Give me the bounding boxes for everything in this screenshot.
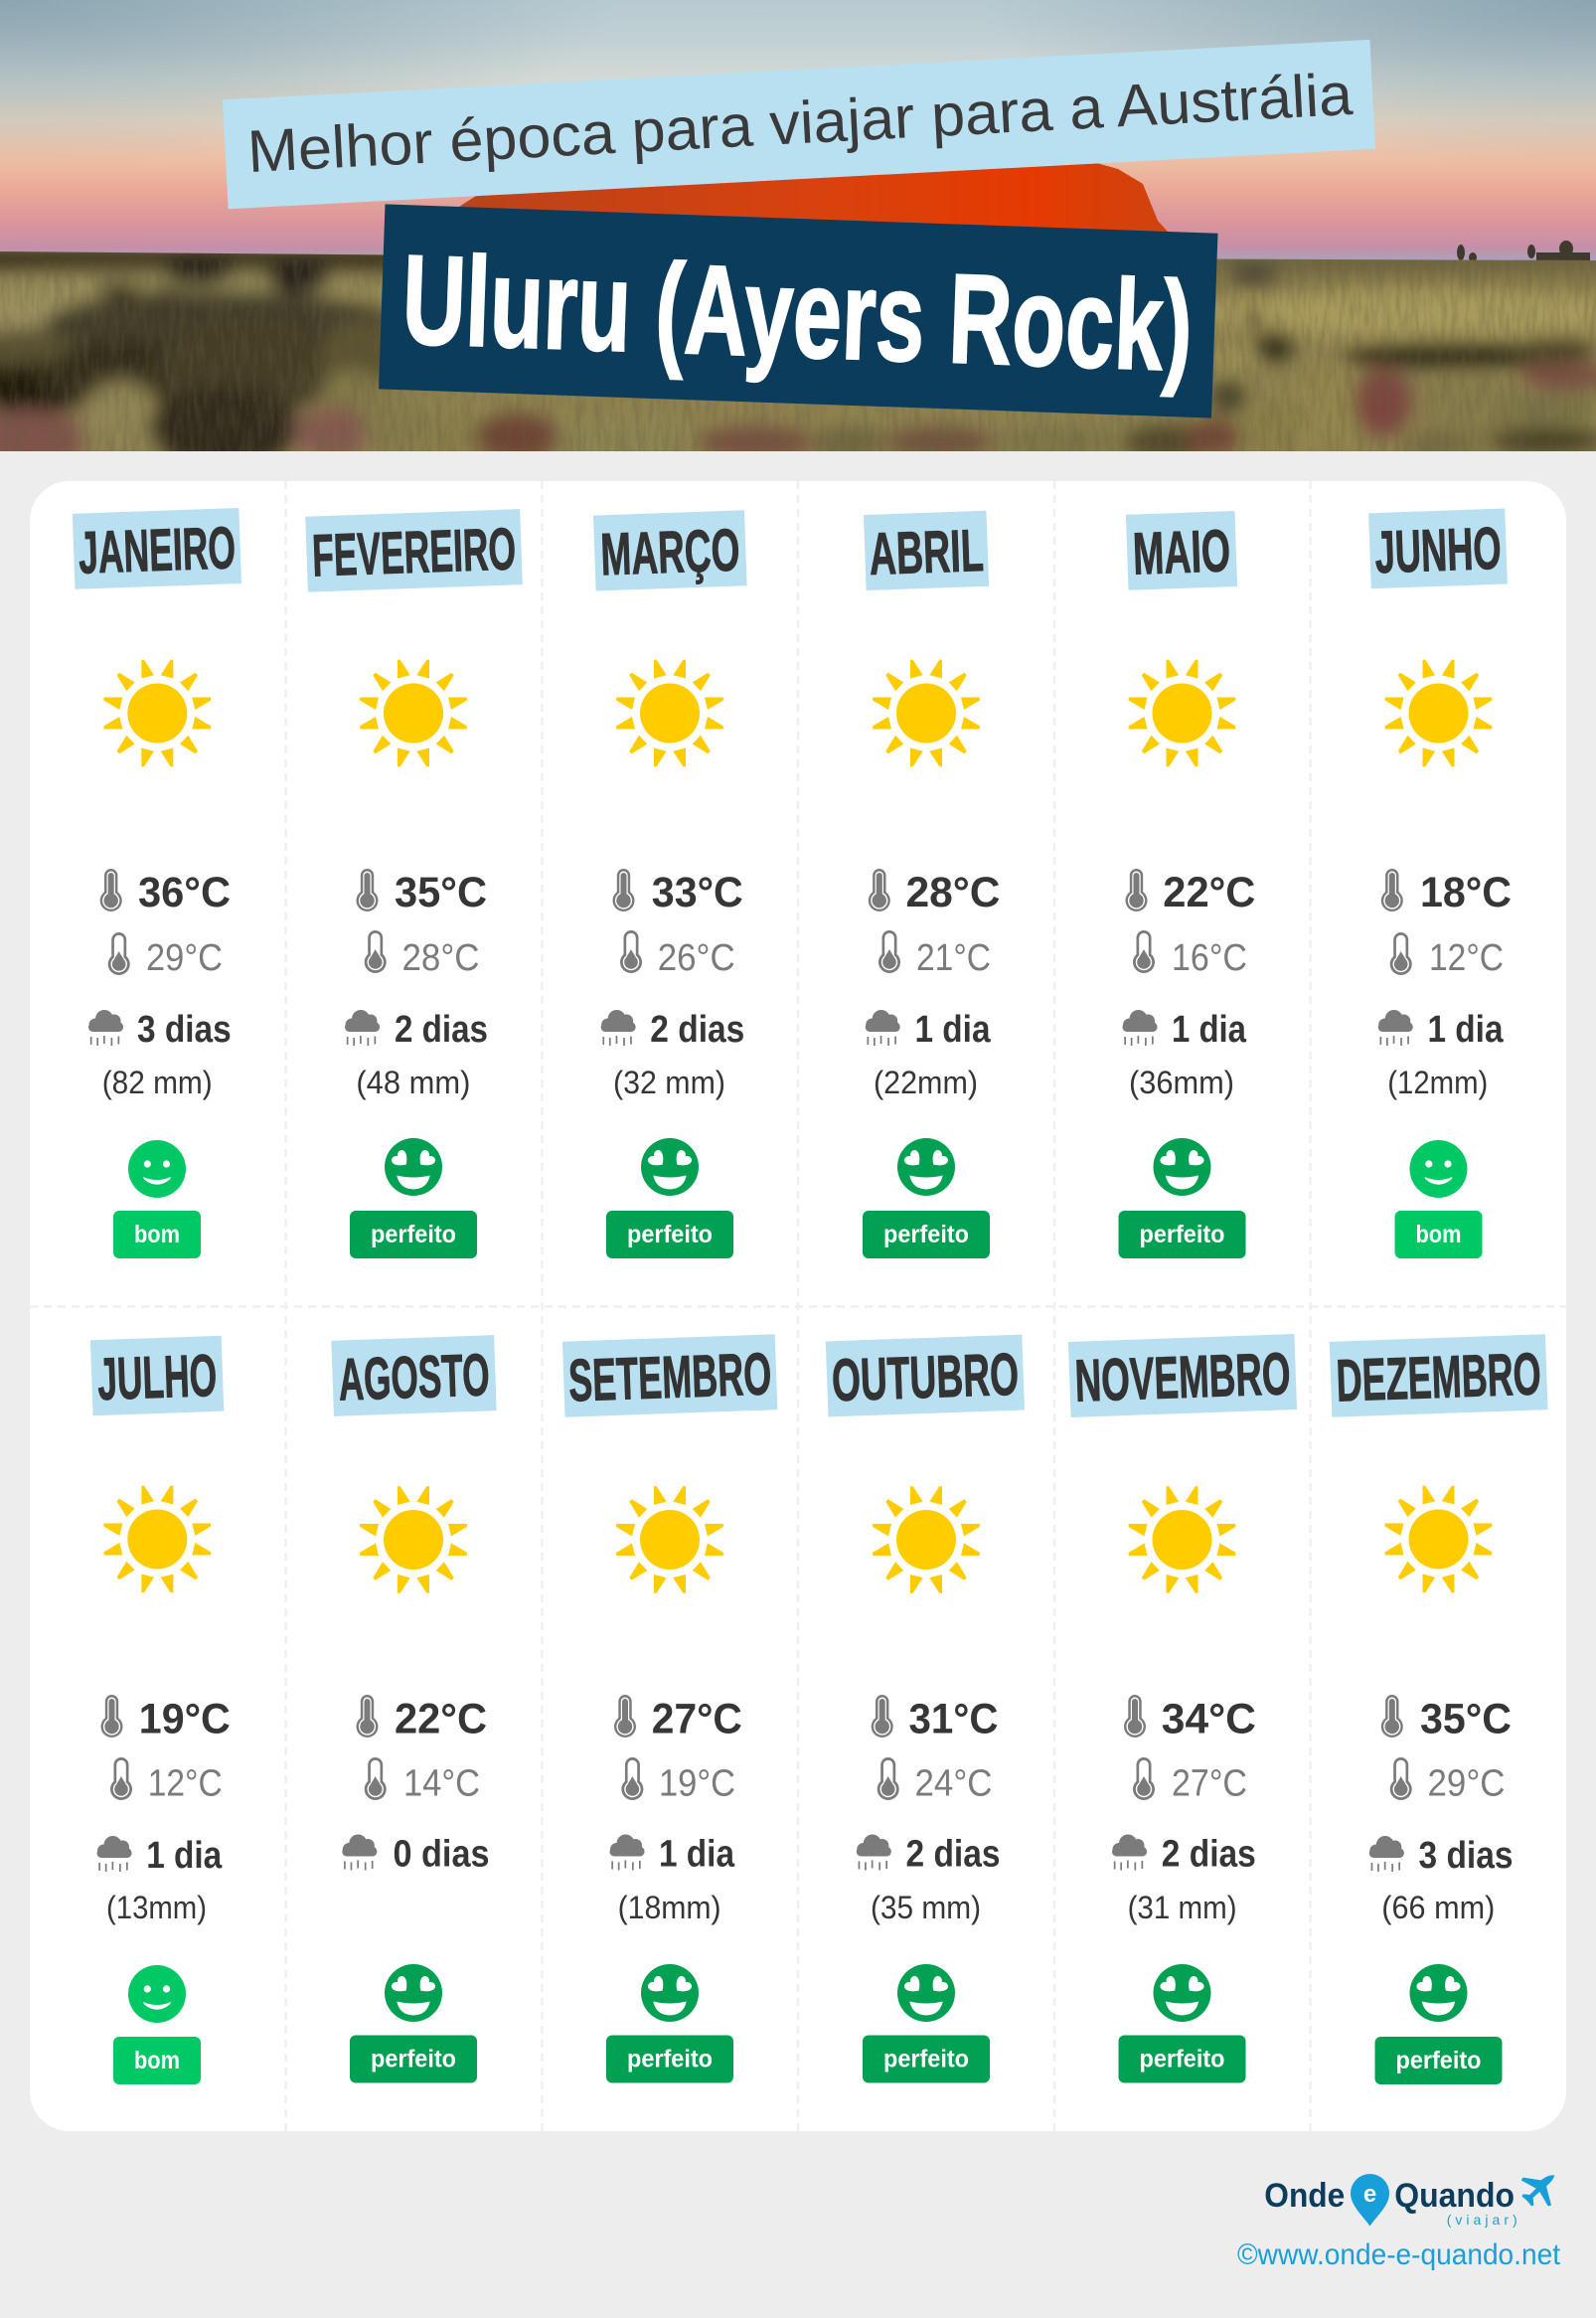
month: Junho — [1368, 509, 1512, 1258]
icon: thermometer low — [878, 930, 900, 973]
panel: months card — [30, 481, 1566, 2131]
icon: rain — [601, 1010, 636, 1046]
rainfall: (13mm) — [106, 1890, 207, 1925]
icon: rain — [97, 1836, 131, 1872]
rating: bom — [113, 2037, 201, 2084]
icon: thermometer high — [614, 1695, 636, 1738]
max temperature: 36°C — [138, 869, 231, 916]
rating: perfeito — [606, 1211, 733, 1258]
header photo: Uluru at sunset — [0, 0, 1596, 469]
icon: good face — [1409, 1140, 1467, 1198]
grass texture — [0, 260, 1596, 451]
icon: perfect face — [385, 1964, 442, 2022]
icon: rain — [857, 1835, 891, 1871]
rainfall: (18mm) — [618, 1890, 721, 1925]
icon: perfect face — [1153, 1964, 1210, 2022]
icon: rain — [1123, 1010, 1157, 1046]
logo text: Onde: Onde — [1264, 2177, 1345, 2215]
max temperature: 22°C — [1163, 869, 1255, 916]
rainy days: 2 dias — [1162, 1833, 1256, 1875]
rainfall: (82 mm) — [102, 1065, 213, 1100]
bottom strip under title — [422, 414, 482, 461]
icon: thermometer high — [869, 869, 890, 911]
icon: sun — [873, 660, 980, 766]
logo text: viajar: (viajar) — [1447, 2212, 1517, 2228]
heading: Outubro — [826, 1335, 1025, 1416]
min temperature: 28°C — [401, 937, 479, 979]
max temperature: 22°C — [395, 1696, 487, 1743]
heading: Setembro — [562, 1334, 777, 1417]
rating: perfeito — [1119, 2036, 1246, 2083]
rating: perfeito: perfeito — [1395, 2047, 1481, 2074]
left bottom — [0, 410, 94, 465]
icon: thermometer high — [612, 869, 634, 911]
rating: perfeito: perfeito — [1139, 2046, 1224, 2073]
heading: Abril — [864, 511, 989, 590]
month: Fevereiro — [305, 509, 523, 1258]
month: Março — [593, 510, 747, 1258]
icon: rain — [342, 1835, 377, 1871]
heading: Junho: JUNHO — [1373, 515, 1503, 585]
max temperature: 27°C — [652, 1696, 742, 1743]
rainy days: 1 dia — [1172, 1009, 1247, 1051]
icon: thermometer high — [100, 869, 122, 911]
icon: perfect face — [641, 1964, 699, 2022]
min temperature: 16°C — [1172, 937, 1247, 979]
heading: Julho: JULHO — [96, 1342, 218, 1412]
rainfall: (32 mm) — [613, 1065, 725, 1100]
icon: rain — [1378, 1010, 1413, 1046]
rating: perfeito — [606, 2036, 733, 2083]
icon: thermometer low — [365, 1757, 387, 1800]
min temperature: 12°C — [1429, 937, 1504, 979]
icon: good face — [128, 1965, 186, 2023]
min temperature: 14°C — [403, 1763, 480, 1805]
icon: sun — [1129, 660, 1236, 766]
logo: Onde e Quando (viajar) — [1264, 2174, 1554, 2228]
far band — [0, 251, 384, 283]
month: Janeiro — [73, 508, 241, 1258]
rating: perfeito: perfeito — [883, 1221, 969, 1248]
heading: Março: MARÇO — [599, 517, 740, 587]
heading: Setembro: SETEMBRO — [567, 1340, 772, 1414]
rating: bom: bom — [1415, 1221, 1461, 1248]
title banner: Uluru (Ayers Rock): Uluru (Ayers Rock) — [400, 229, 1195, 399]
left field — [0, 272, 407, 300]
icon: rain — [1112, 1835, 1147, 1871]
heading: Janeiro — [73, 508, 241, 589]
heading: Janeiro: JANEIRO — [78, 514, 237, 586]
icon: sun — [616, 1486, 723, 1593]
ground — [0, 248, 1596, 469]
max temperature: 33°C — [652, 869, 743, 916]
icon: thermometer high — [1381, 1695, 1403, 1738]
rainy days: 2 dias — [650, 1009, 744, 1051]
rating: perfeito — [350, 1211, 477, 1258]
icon: thermometer low — [878, 1757, 899, 1800]
icon: thermometer low — [108, 932, 130, 975]
icon: sun — [360, 660, 467, 766]
heading: Outubro: OUTUBRO — [831, 1341, 1020, 1413]
min temperature: 12°C — [148, 1763, 223, 1805]
min temperature: 21°C — [916, 937, 991, 979]
icon: thermometer high — [1125, 869, 1147, 911]
month: Novembro — [1068, 1334, 1297, 2083]
month: Abril — [863, 511, 1000, 1258]
max temperature: 31°C — [908, 1696, 998, 1743]
max temperature: 35°C — [1420, 1696, 1512, 1743]
icon: rain — [610, 1835, 644, 1871]
rainy days: 0 dias — [394, 1833, 489, 1875]
month: Julho — [90, 1336, 231, 2084]
icon: thermometer high — [1381, 869, 1403, 911]
min temperature: 24°C — [914, 1763, 992, 1805]
icon: perfect face — [897, 1138, 955, 1196]
icon: sun — [1129, 1486, 1236, 1593]
rating: perfeito — [1119, 1211, 1246, 1258]
heading: Novembro — [1068, 1334, 1297, 1417]
icon: thermometer high — [1124, 1695, 1146, 1738]
icon: sun — [103, 1486, 211, 1592]
rainfall: (48 mm) — [356, 1065, 470, 1100]
rainfall: (31 mm) — [1128, 1890, 1237, 1925]
logo text: Quando: Quando — [1394, 2177, 1515, 2215]
icon: thermometer low — [1390, 932, 1412, 975]
rainfall: (12mm) — [1387, 1065, 1488, 1100]
icon: plane — [1521, 2175, 1554, 2206]
icon: rain — [1369, 1836, 1404, 1872]
icon: sun — [1385, 660, 1493, 766]
icon: map pin: e — [1363, 2181, 1376, 2208]
max temperature: 19°C — [139, 1696, 231, 1743]
icon: thermometer high — [872, 1695, 893, 1738]
icon: thermometer low — [1390, 1757, 1412, 1800]
rainy days: 1 dia — [146, 1835, 223, 1877]
rating: perfeito — [863, 1211, 990, 1258]
rainy days: 2 dias — [906, 1833, 1000, 1875]
icon: thermometer low — [110, 1757, 132, 1800]
rating: perfeito: perfeito — [1139, 1221, 1224, 1248]
heading: Novembro: NOVEMBRO — [1073, 1340, 1292, 1414]
rainy days: 1 dia — [914, 1009, 991, 1051]
title banner: Uluru (Ayers Rock) — [379, 204, 1217, 418]
icon: perfect face — [897, 1964, 955, 2022]
rainy days: 2 dias — [395, 1009, 488, 1051]
rating: bom — [113, 1211, 201, 1258]
icon: perfect face — [641, 1138, 699, 1196]
rainfall: (35 mm) — [871, 1890, 981, 1925]
month: Outubro — [826, 1335, 1025, 2083]
rainy days: 3 dias — [1419, 1835, 1513, 1877]
min temperature: 27°C — [1172, 1763, 1247, 1805]
heading: Maio — [1126, 511, 1237, 590]
rating: perfeito: perfeito — [371, 2046, 456, 2073]
heading: Junho — [1368, 509, 1508, 588]
rating: perfeito: perfeito — [627, 2046, 713, 2073]
heading: Abril: ABRIL — [869, 517, 985, 587]
icon: rain — [345, 1010, 380, 1046]
max temperature: 34°C — [1162, 1696, 1256, 1743]
rainy days: 3 dias — [137, 1009, 232, 1051]
rating: perfeito — [350, 2036, 477, 2083]
icon: perfect face — [1409, 1964, 1467, 2022]
icon: thermometer low — [620, 930, 642, 973]
icon: thermometer high — [356, 869, 378, 911]
title banner: Melhor época para viajar para a Austrália — [223, 40, 1375, 209]
right field — [1293, 274, 1564, 284]
min temperature: 29°C — [1427, 1763, 1505, 1805]
rock: Uluru — [459, 163, 1168, 232]
min temperature: 29°C — [146, 937, 223, 979]
icon: perfect face — [1153, 1138, 1210, 1196]
month: Dezembro — [1330, 1334, 1548, 2084]
rating: perfeito: perfeito — [627, 1221, 713, 1248]
rainy days: 1 dia — [1427, 1009, 1504, 1051]
credit url: ©www.onde-e-quando.net — [1237, 2238, 1561, 2271]
month: Agosto — [331, 1335, 497, 2083]
rainfall: (36mm) — [1129, 1065, 1234, 1100]
heading: Maio: MAIO — [1132, 517, 1231, 587]
icon: sun — [360, 1486, 467, 1593]
max temperature: 28°C — [906, 869, 1000, 916]
month: Setembro — [562, 1334, 777, 2083]
rainfall: (66 mm) — [1381, 1890, 1495, 1925]
month: Maio — [1119, 511, 1255, 1258]
horizon trees — [1457, 241, 1590, 262]
heading: Fevereiro — [305, 509, 523, 592]
icon: good face — [128, 1140, 186, 1198]
icon: sun — [616, 660, 723, 766]
icon: rain — [866, 1010, 900, 1046]
rainy days: 1 dia — [659, 1833, 735, 1875]
rating: perfeito — [1375, 2037, 1503, 2084]
rating: perfeito: perfeito — [883, 2046, 969, 2073]
max temperature: 35°C — [395, 869, 487, 916]
rating: bom — [1395, 1211, 1483, 1258]
icon: thermometer high — [356, 1695, 378, 1738]
icon: sun — [103, 660, 211, 766]
icon: thermometer high — [101, 1695, 123, 1738]
title banner: Melhor época para viajar para a Austrália: Melhor época para viajar para a Austrália — [245, 61, 1355, 185]
rating: bom: bom — [134, 1221, 180, 1248]
rainfall: (22mm) — [874, 1065, 978, 1100]
min temperature: 19°C — [659, 1763, 735, 1805]
rating: perfeito — [863, 2036, 990, 2083]
icon: thermometer low — [365, 930, 387, 973]
icon: map pin — [1351, 2174, 1389, 2227]
max temperature: 18°C — [1420, 869, 1512, 916]
min temperature: 26°C — [658, 937, 735, 979]
heading: Julho — [90, 1336, 224, 1415]
rating: perfeito: perfeito — [371, 1221, 456, 1248]
icon: rain — [88, 1010, 123, 1046]
rating: bom: bom — [134, 2047, 180, 2074]
icon: perfect face — [385, 1138, 442, 1196]
icon: sun — [873, 1486, 980, 1593]
icon: thermometer low — [621, 1757, 643, 1800]
icon: sun — [1385, 1486, 1493, 1592]
heading: Agosto — [331, 1335, 497, 1416]
heading: Março — [593, 510, 747, 591]
heading: Fevereiro: FEVEREIRO — [311, 515, 517, 589]
icon: thermometer low — [1133, 1757, 1155, 1800]
heading: Agosto: AGOSTO — [337, 1341, 491, 1413]
icon: thermometer low — [1133, 930, 1155, 973]
